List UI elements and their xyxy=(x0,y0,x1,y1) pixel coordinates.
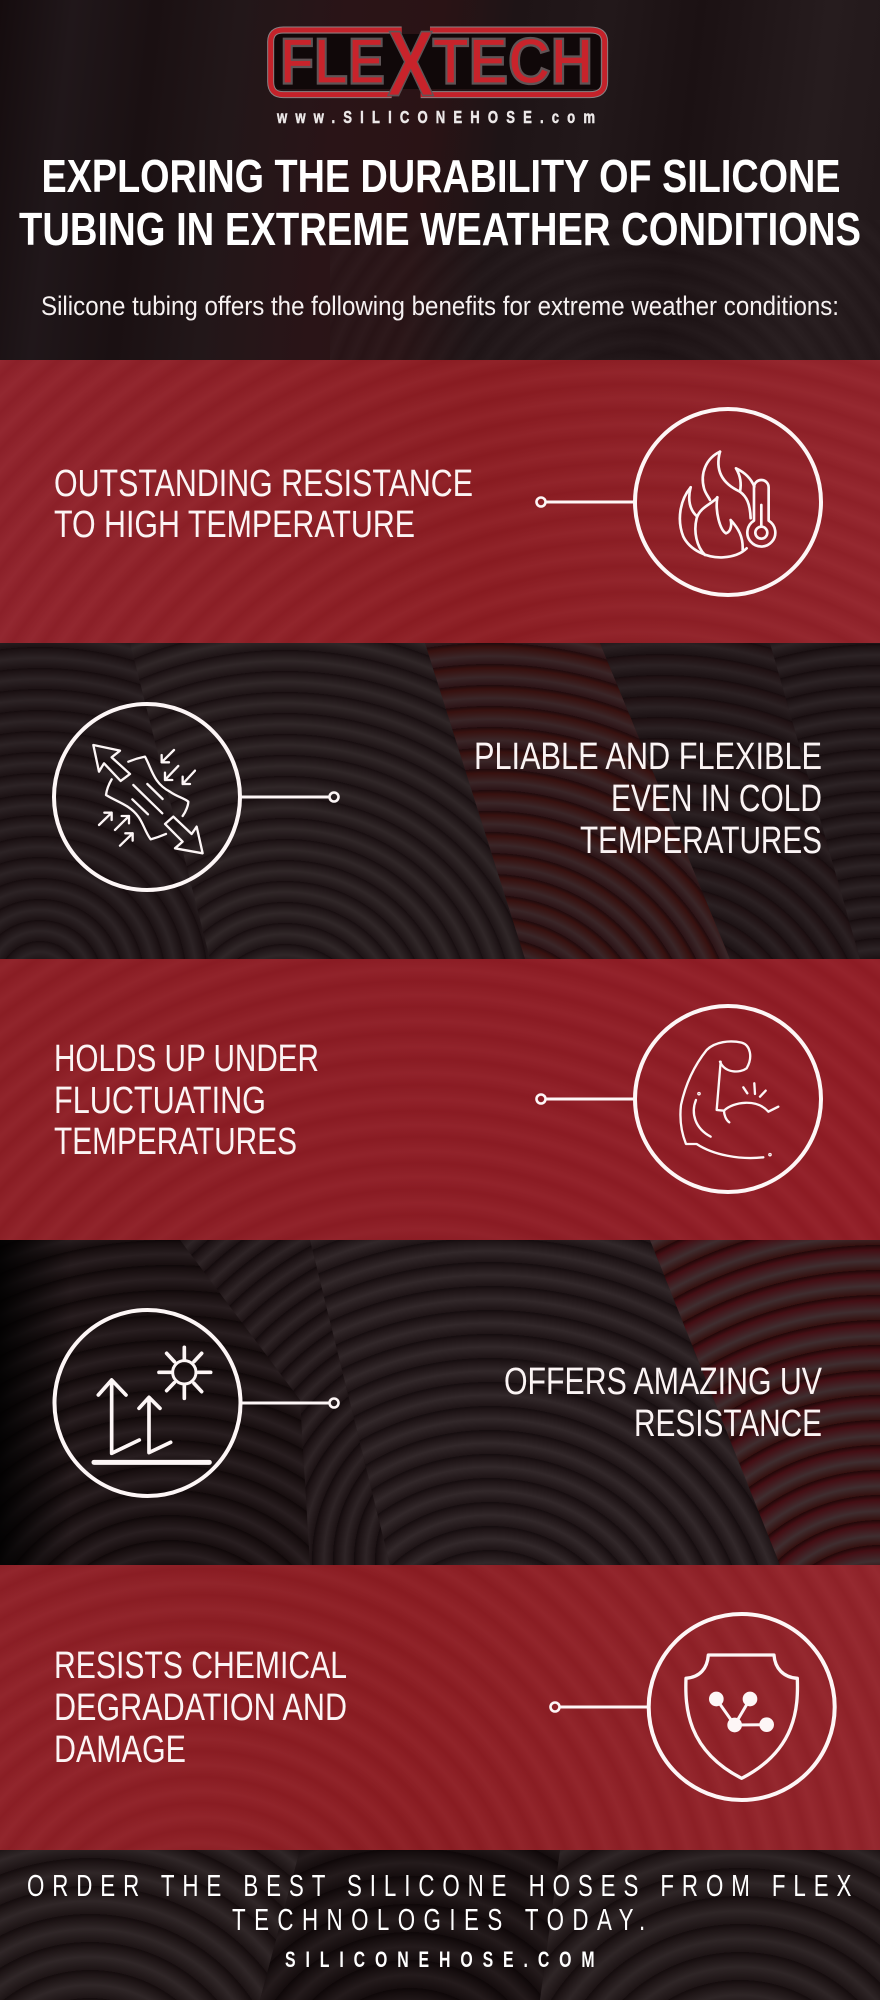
panel: UV resistance xyxy=(0,1240,880,1565)
heading: RESISTANCE xyxy=(634,1403,822,1445)
logo: Flextech: FLE xyxy=(280,24,385,97)
heading: TEMPERATURES xyxy=(54,1121,297,1163)
logo: Flextech: X xyxy=(387,11,434,115)
logo: Flextech: TECH xyxy=(433,24,593,97)
panel: high temperature xyxy=(0,360,880,643)
heading: DAMAGE xyxy=(54,1729,186,1771)
heading: EVEN IN COLD xyxy=(611,778,822,820)
website: SILICONEHOSE.COM xyxy=(285,1949,595,1973)
panel: fluctuating temperatures xyxy=(0,959,880,1240)
heading: FLUCTUATING xyxy=(54,1080,266,1122)
panel: chemical resistance xyxy=(0,1565,880,1850)
call to action: TECHNOLOGIES TODAY. xyxy=(232,1902,645,1937)
connector xyxy=(239,1398,338,1408)
heading xyxy=(54,1038,319,1163)
connector xyxy=(536,1094,635,1104)
connector xyxy=(550,1702,649,1712)
call to action xyxy=(27,1868,851,1937)
icon: stretching material xyxy=(54,704,240,890)
heading xyxy=(54,1645,347,1771)
heading: HOLDS UP UNDER xyxy=(54,1038,319,1080)
logo url: www.SILICONEHOSE.com xyxy=(276,108,595,128)
logo: Flextech xyxy=(271,11,605,115)
heading: DEGRADATION AND xyxy=(54,1687,347,1729)
title xyxy=(19,150,861,255)
icon: UV rays reflecting xyxy=(54,1310,240,1496)
heading: OUTSTANDING RESISTANCE xyxy=(54,463,473,505)
icon: shield with molecule xyxy=(649,1614,835,1800)
call to action: ORDER THE BEST SILICONE HOSES FROM FLEX xyxy=(27,1868,851,1903)
heading: TO HIGH TEMPERATURE xyxy=(54,504,415,546)
footer panel xyxy=(0,1850,880,2000)
connector xyxy=(536,498,635,506)
icon: flexed arm xyxy=(635,1006,821,1192)
header panel xyxy=(0,0,880,360)
heading: RESISTS CHEMICAL xyxy=(54,1645,347,1687)
panel: flexible in cold xyxy=(0,643,880,959)
heading xyxy=(504,1361,823,1445)
heading xyxy=(474,736,822,862)
connector xyxy=(239,792,338,802)
icon: flame and thermometer xyxy=(635,409,821,595)
heading xyxy=(54,463,473,546)
